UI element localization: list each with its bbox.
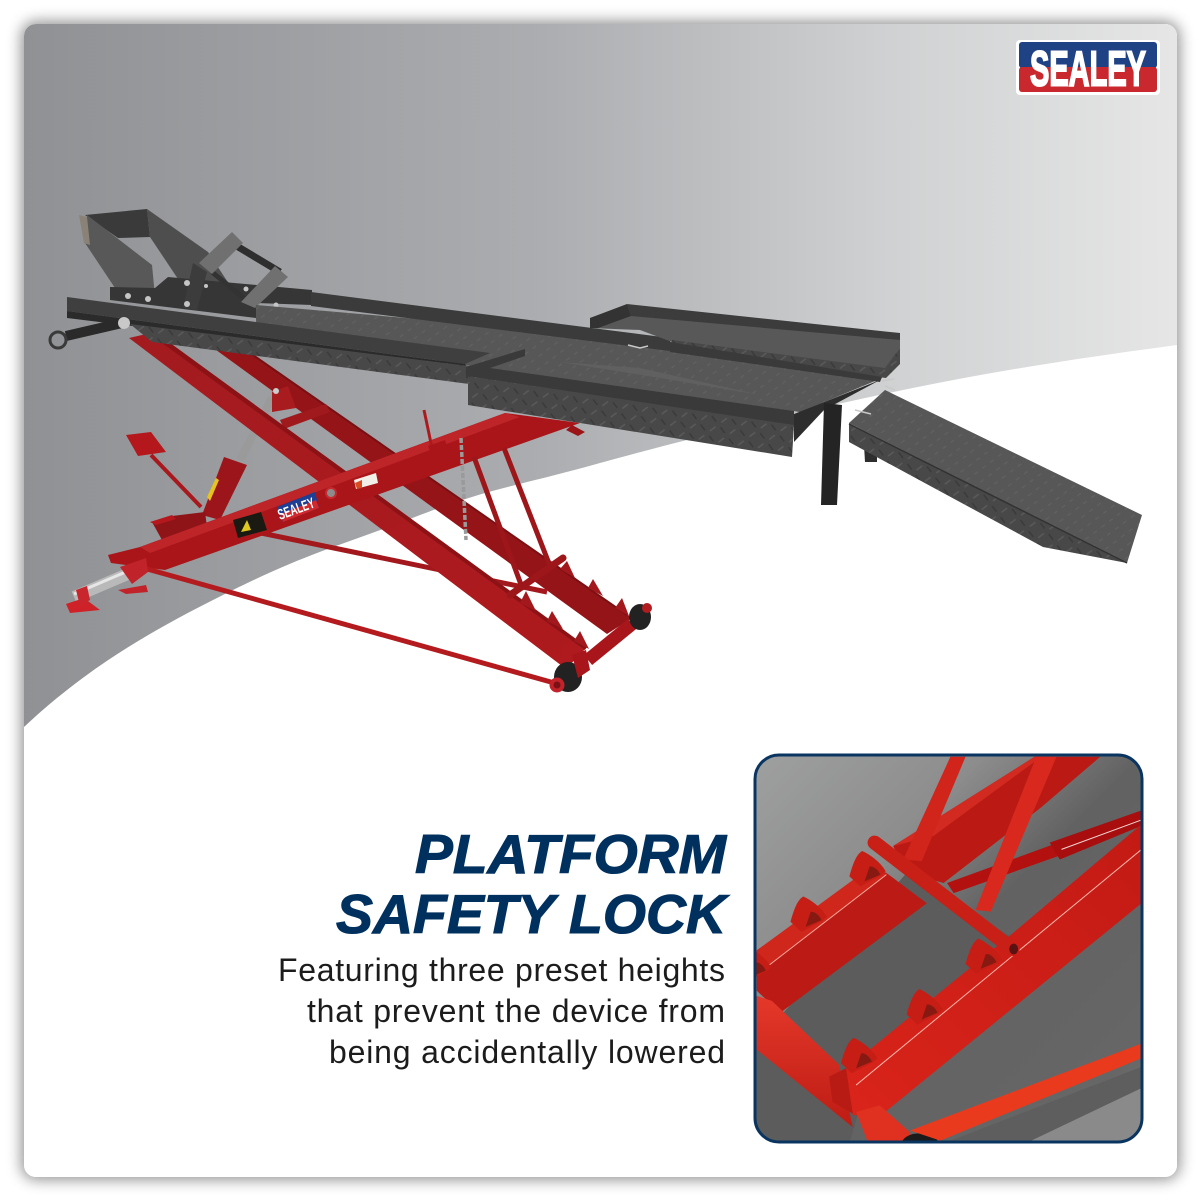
middle rod [947,843,1058,893]
rear scissor beam [212,347,632,634]
crossbar [875,843,1013,949]
upright struts [903,757,966,861]
tow handle [50,317,130,348]
near beam teeth [520,591,589,649]
stickers: SEALEY [276,495,317,524]
front rod [910,1042,1146,1141]
body text: that prevent the device from [307,993,725,1029]
front side pan [466,342,882,457]
main deck [67,292,882,412]
support leg [821,403,842,505]
rear side pan [590,304,900,378]
logo: Sealey [1016,40,1160,96]
foot pedal [126,432,208,540]
body text: Featuring three preset heights [278,952,725,988]
front cross tube [757,996,853,1127]
near scissor beam [129,332,587,669]
pin clips [628,345,895,414]
stickers [233,473,378,538]
teeth [735,851,1002,1073]
body text: being accidentally lowered [329,1034,725,1070]
rear beam [893,757,1100,883]
body text [278,952,725,1070]
lock lever and chain [424,410,466,540]
left beam [757,866,927,1013]
ramp [849,390,1142,563]
heading [336,823,730,945]
heading: SAFETY LOCK [336,883,730,945]
heading: PLATFORM [415,823,727,885]
rear lower rod [261,533,547,592]
rear cross tube and wheels [550,603,652,692]
round end and roller [856,1106,910,1140]
front rod and silver cylinder [66,558,558,684]
front wheel chock [79,209,312,318]
right beam [843,821,1146,1115]
inset photo: safety lock detail [754,754,1144,1144]
crossing beam [108,413,580,570]
rear beam teeth [560,561,629,616]
hydraulic rod and cylinder [202,386,330,520]
product photo: motorcycle lift [50,209,1142,692]
safety struts [474,448,563,595]
floor [756,756,1140,1140]
